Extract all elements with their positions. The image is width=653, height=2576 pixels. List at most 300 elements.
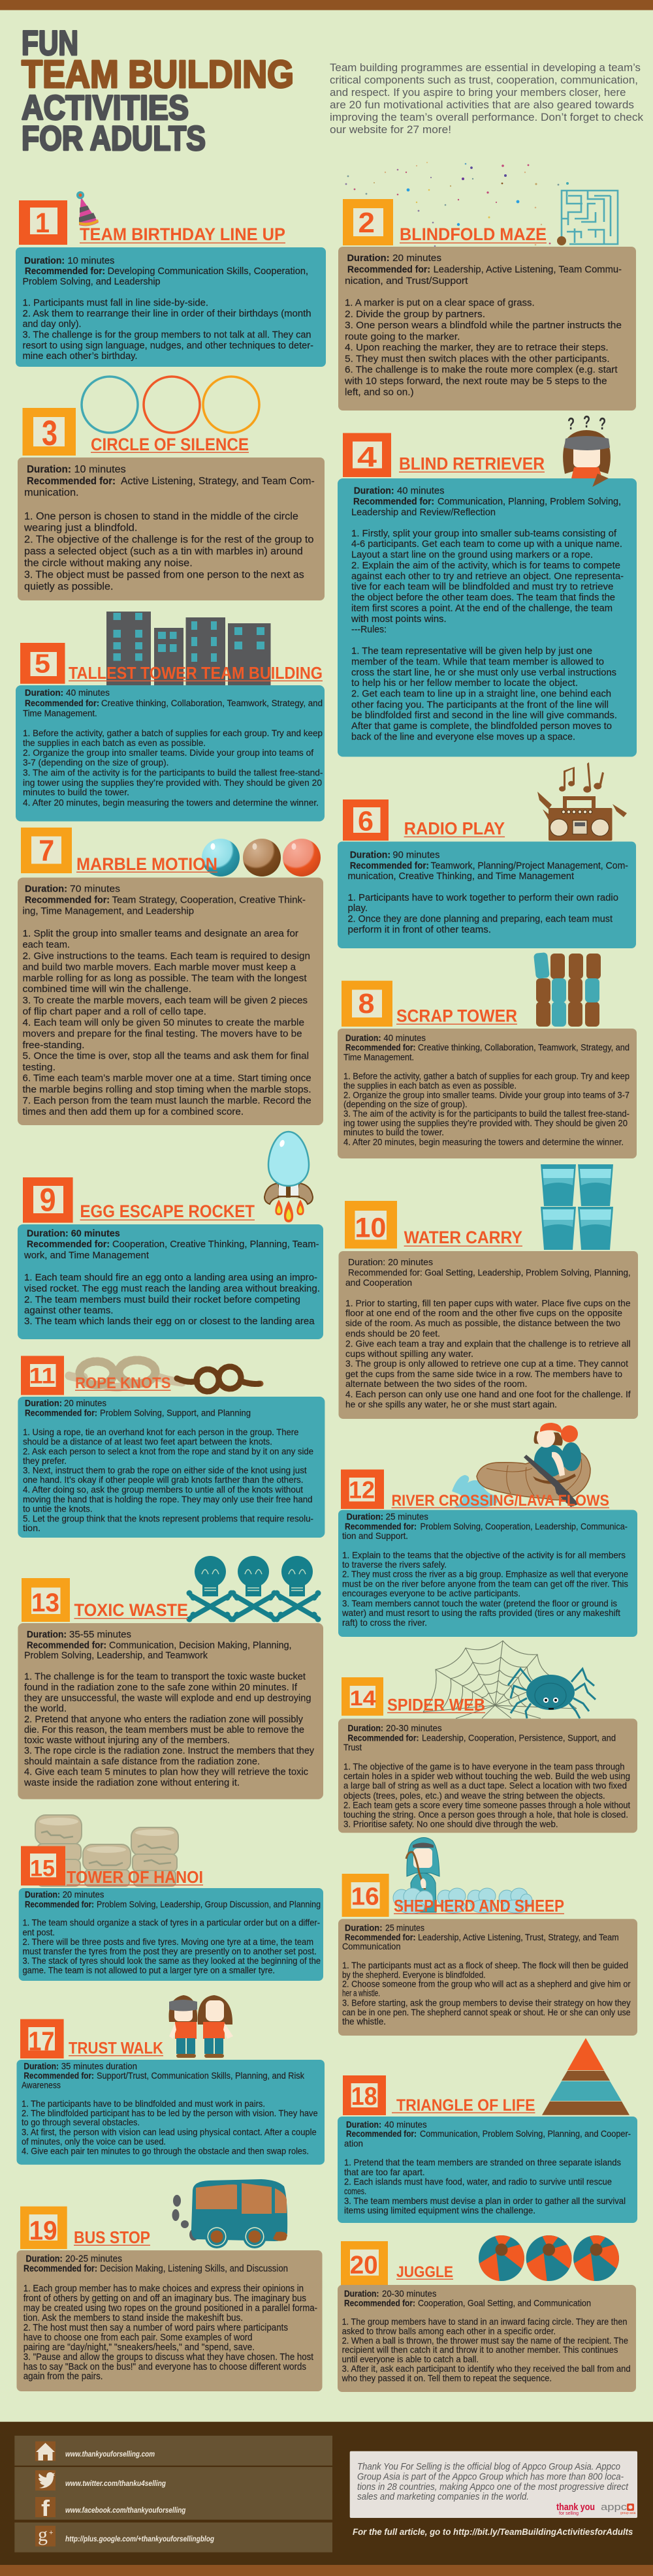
icon: rope knots — [69, 1360, 261, 1391]
text block: Recommended for: — [345, 1522, 417, 1531]
text block: mine each other’s birthday. — [22, 351, 137, 362]
text block — [22, 1890, 321, 1975]
text block: pairing are "day/night," "sneakers/heels," and "spend, save. — [24, 2342, 255, 2353]
text block: game. The team is not allowed to put a larger tyre on a smaller tyre. — [22, 1966, 275, 1975]
text block: 20 minutes — [63, 1890, 104, 1899]
number badge 5 — [20, 643, 65, 684]
number badge 8: 8 — [358, 988, 375, 1019]
text block: 10 minutes — [67, 256, 114, 266]
number badge 18: 18 — [351, 2083, 377, 2111]
text block: 2. Give each team a tray and explain that the challenge is to retrieve all — [345, 1338, 631, 1348]
heading: RIVER CROSSING/LAVA FLOWS — [392, 1492, 609, 1510]
google plus link: http://plus.google.com/+thankyouforsellingblog — [65, 2534, 215, 2543]
number badge 12 — [341, 1470, 384, 1509]
google plus link: + — [49, 2529, 53, 2537]
text block: ation — [344, 2138, 363, 2149]
number badge 7 — [21, 828, 72, 873]
text block: 20 minutes — [64, 1398, 106, 1408]
text block: Recommended for: — [24, 2070, 94, 2081]
number badge 16: 16 — [351, 1884, 379, 1911]
text block: to untie the knots. — [23, 1504, 93, 1514]
text block: Creative thinking, Collaboration, Teamwork, Strategy, and — [418, 1043, 629, 1052]
text block: side of the room. As much as possible, the distance between the two — [345, 1318, 620, 1328]
text block: Leadership, Cooperation, Persistence, Support, and — [422, 1733, 616, 1743]
activity 13: toxic waste — [18, 1556, 323, 1799]
facebook link: www.facebook.com/thankyouforselling — [65, 2506, 186, 2515]
text block: against each other to try and retrieve an object. One representa- — [351, 572, 624, 582]
number badge 4: 4 — [357, 441, 377, 473]
text block: the supplies in each batch as even as possible. — [23, 738, 206, 748]
text block: 3. The team members must devise a plan in order to gather all the survival — [344, 2196, 626, 2206]
intro paragraph: and respect. If you aspire to bring your members closer, here — [330, 86, 626, 99]
text block: with most points wins. — [351, 614, 447, 625]
text block: 3. After it, ask each participant to identify who they received the ball from and — [342, 2363, 631, 2374]
text block: 3. The challenge is for the group members to not talk at all. They can — [22, 330, 311, 341]
text block: tion. Ask the members to stand inside the makeshift bus. — [24, 2313, 243, 2323]
text block — [351, 486, 624, 743]
text block: 4. After 20 minutes, begin measuring the towers and determine the winner. — [343, 1137, 624, 1147]
main title: FOR ADULTS — [22, 119, 206, 158]
bottom bar — [0, 2565, 653, 2576]
text block: Duration: — [347, 1512, 383, 1522]
text block: 1. Each team should fire an egg onto a landing area using an impro- — [24, 1272, 317, 1283]
text block: 1. Participants have to work together to perform their own radio — [347, 893, 618, 903]
text block: 2. Each islands must have food, water, and radio to survive until rescue — [344, 2176, 612, 2186]
heading: EGG ESCAPE ROCKET — [80, 1202, 255, 1221]
icon: boombox radio — [537, 474, 627, 841]
text block — [343, 1723, 630, 1829]
text block: Creative thinking, Collaboration, Teamwork, Strategy, and — [101, 698, 323, 708]
text block: 1. Before the activity, gather a batch of supplies for each group. Try and keep — [343, 1072, 629, 1081]
panel: instructions — [18, 1623, 323, 1799]
text block: Recommended for: — [24, 2263, 97, 2274]
text block: 40 minutes — [385, 2119, 427, 2130]
icon: egg rocket — [264, 1132, 313, 1222]
text block — [344, 2119, 631, 2215]
icon: ball — [557, 236, 566, 245]
text block: must be on the river before anyone from the team can get off the river. This — [342, 1579, 628, 1589]
number badge 13 — [22, 1578, 70, 1622]
activity 3: circle of silence — [18, 377, 325, 600]
text block: 2. Explain the aim of the activity, which is for teams to compete — [351, 561, 620, 571]
text block: 1. One person is chosen to stand in the middle of the circle — [24, 511, 298, 522]
text block: (depending on the size of group). — [343, 1099, 468, 1110]
panel: instructions — [18, 878, 323, 1125]
heading: JUGGLE — [396, 2263, 453, 2281]
activity 18: triangle of life — [338, 2038, 637, 2223]
text block: Recommended for: — [27, 1641, 106, 1651]
text block: get the cups from the same side twice in a row. The members have to — [345, 1369, 622, 1379]
text block: the marble begins rolling and stop timing when the marble stops. — [22, 1084, 311, 1095]
text block: Recommended for: — [25, 894, 110, 906]
number badge 7: 7 — [39, 834, 54, 867]
activity 1: team birthday line up — [16, 191, 326, 367]
link panels — [14, 2436, 332, 2553]
heading: TEAM BIRTHDAY LINE UP — [80, 225, 285, 244]
icon: water splash — [452, 1475, 498, 1508]
heading: WATER CARRY — [404, 1228, 522, 1247]
text block: 7. Each person from the team must launch the marble. Record the — [22, 1095, 311, 1106]
text block: Recommended for: — [345, 1043, 415, 1052]
number badge 2: 2 — [358, 207, 375, 239]
text block: 2. There will be three posts and five tyres. Moving one tyre at a time, the team — [22, 1937, 313, 1947]
number badge 10: 10 — [355, 1213, 386, 1244]
text block: with 10 steps forward, the next route may be 5 steps to the — [344, 376, 607, 386]
text block: recipient will then catch it and throw it to another member. This continues — [342, 2344, 618, 2355]
text block: member of the team. While that team member is allowed to — [351, 657, 604, 667]
text block: Duration: — [26, 2254, 63, 2265]
google plus link — [35, 2524, 215, 2547]
text block: Duration: — [27, 464, 71, 475]
text block: 3. The team which lands their egg on or closest to the landing area — [24, 1316, 315, 1327]
text block: objects (trees, poles, etc.) and weave the string between the objects. — [343, 1791, 605, 1801]
text block — [344, 253, 622, 398]
text block: of minutes, only the voice can be used. — [22, 2136, 166, 2147]
number badge 20 — [341, 2241, 388, 2286]
text block: Communication, Problem Solving, Planning, and Cooper- — [420, 2128, 631, 2139]
intro paragraph: improving the team’s overall performance. Don’t forget to check — [330, 111, 643, 123]
panel: instructions — [18, 458, 325, 600]
text block: tion. — [23, 1523, 40, 1533]
number badge 11: 11 — [29, 1364, 56, 1389]
text block: 5. Once the time is over, stop all the teams and ask them for final — [22, 1051, 309, 1061]
text block: the supplies in each batch as even as possible. — [343, 1081, 517, 1091]
number badge 1 — [19, 200, 67, 245]
panel: instructions — [338, 1919, 637, 2036]
number badge 11 — [21, 1356, 64, 1395]
text block: 2. Give instructions to the teams. Each team is required to design — [22, 950, 310, 962]
text block: 20-30 minutes — [386, 1723, 442, 1733]
logo: thank you for selling: thank you — [556, 2502, 595, 2513]
number badge 14 — [342, 1677, 383, 1716]
number badge 19 — [20, 2207, 67, 2249]
text block: 3. To create the marble movers, each team will be given 2 pieces — [22, 995, 308, 1006]
text block: Recommended for: — [25, 266, 105, 277]
text block: Problem Solving, Leadership, and Teamwork — [24, 1651, 208, 1661]
main title: FUN — [22, 24, 78, 63]
text block: waste inside the radiation zone without entering it. — [24, 1778, 240, 1788]
text block: wearing just a blindfold. — [24, 522, 137, 534]
text block: cross the start line, he or she must only use verbal instructions — [351, 668, 616, 678]
icon: spider web — [423, 1641, 577, 1718]
text block: work, and Time Management — [24, 1250, 150, 1261]
text block: 5. They must then switch places with the other participants. — [345, 354, 610, 364]
heading: RADIO PLAY — [404, 818, 505, 838]
text block: 3. At first, the person with vision can lead using physical contact. After a couple — [22, 2126, 317, 2137]
text block: by the shepherd. Everyone is blindfolded. — [342, 1970, 486, 1980]
activity 7: marble motion — [18, 828, 323, 1125]
text block: movers and prepare for the final testing. The movers have to be — [22, 1029, 302, 1039]
panel: instructions — [17, 2060, 325, 2165]
text block: of flip chart paper and a roll of cello tape. — [22, 1006, 206, 1017]
text block: minutes to build the tower. — [23, 787, 129, 798]
text block: perform it in front of other teams. — [347, 925, 491, 935]
text block: 2. Get each team to line up in a straight line, one behind each — [351, 689, 611, 700]
icon: raft with paddlers — [477, 1423, 590, 1507]
text block — [342, 2288, 631, 2383]
text block: 3-7 (depending on the size of group). — [23, 758, 168, 768]
text block: each team. — [22, 939, 70, 950]
text block: 2. The host must then say a number of word pairs where participants — [24, 2323, 288, 2333]
text block: Team Strategy, Cooperation, Creative Think- — [112, 894, 306, 906]
text block — [342, 1923, 631, 2026]
number badge 6: 6 — [358, 806, 374, 837]
text block: Recommended for: — [25, 698, 99, 708]
text block: times and then add them up for a combined score. — [22, 1106, 244, 1117]
heading: TRUST WALK — [69, 2040, 163, 2058]
number badge 2 — [343, 199, 393, 245]
number badge 1: 1 — [35, 208, 50, 239]
number badge 15 — [21, 1846, 65, 1885]
text block: items using limited equipment wins the challenge. — [344, 2205, 535, 2215]
text block: 2. Choose someone from the group who will act as a shepherd and give him or — [342, 1979, 631, 1989]
text block: Cooperation, Goal Setting, and Communication — [418, 2297, 591, 2308]
activity 14: spider web — [338, 1641, 637, 1833]
text block: certain holes in a spider web without touching the web. Build the web using — [343, 1771, 630, 1781]
panel: instructions — [338, 2117, 637, 2223]
text block: resort to using sign language, nudges, and other techniques to deter- — [22, 341, 313, 351]
text block: that are too far apart. — [344, 2167, 424, 2177]
text block: can be in one pen. The shepherd cannot speak or shout. He or she can only use — [342, 2008, 631, 2017]
logo: appco group: appc — [601, 2502, 628, 2513]
activity 4: blind retriever — [338, 412, 637, 757]
text block: 4. Each team will only be given 50 minutes to create the marble — [22, 1017, 304, 1029]
text block: Problem Solving, Leadership, Group Discussion, and Planning — [97, 1899, 321, 1910]
text block: munication. — [24, 487, 79, 499]
logo: thank you for selling — [556, 2502, 595, 2516]
text block: Problem Solving, Cooperation, Leadership, Communica- — [421, 1522, 628, 1531]
text block: 3. The group is only allowed to retrieve one cup at a time. They cannot — [345, 1358, 628, 1369]
number badge 3: 3 — [42, 414, 57, 453]
text block: ent post. — [22, 1928, 55, 1937]
text block: Duration: — [24, 256, 65, 266]
text block: left, and so on.) — [345, 386, 414, 398]
text block: floor at one end of the room and the other five cups on the opposite — [345, 1308, 622, 1318]
text block: and build two marble movers. Each marble mover must keep a — [22, 962, 296, 972]
text block: 20 minutes — [392, 253, 441, 264]
text block: 2. Ask them to rearrange their line in order of their birthdays (month — [22, 309, 311, 319]
icon: tower buildings — [106, 612, 270, 685]
text block: who they passed it on. Tell them to repeat the sequence. — [342, 2373, 552, 2383]
icon: two friends — [168, 1995, 233, 2058]
text block: Active Listening, Strategy, and Team Com- — [121, 476, 315, 487]
text block: 40 minutes — [383, 1033, 426, 1043]
website link — [35, 2442, 155, 2461]
text block: 4. Upon reaching the marker, they are to retrace their steps. — [345, 342, 609, 353]
heading: MARBLE MOTION — [76, 854, 217, 874]
text block: Duration: — [346, 2119, 381, 2130]
text block: 4. Give each pair ten minutes to go through the obstacle and then swap roles. — [22, 2146, 309, 2156]
text block: other facing you. The participants at the front of the line will — [351, 700, 609, 710]
text block: combined time will win the challenge. — [22, 984, 191, 995]
text block: 2. Pretend that anyone who enters the radiation zone will possibly — [24, 1715, 304, 1725]
icon: three rings — [82, 377, 259, 433]
text block: 1. Firstly, split your group into smaller sub-teams consisting of — [351, 529, 617, 539]
facebook link — [35, 2496, 186, 2521]
text block: water) and must resort to using the rafts provided (tires or any makeshift — [342, 1608, 620, 1618]
facebook link: f — [41, 2496, 50, 2521]
twitter link: www.twitter.com/thanku4selling — [65, 2479, 167, 2488]
text block: Duration: — [25, 1890, 60, 1899]
twitter link — [35, 2470, 167, 2491]
number badge 20: 20 — [350, 2251, 378, 2279]
text block: he or she spills any water, he or she must start again. — [345, 1399, 557, 1410]
text block: Duration: — [350, 850, 390, 860]
text block: again from the pairs. — [24, 2372, 103, 2382]
heading: SHEPHERD AND SHEEP — [394, 1896, 564, 1916]
text block: 10 minutes — [74, 464, 126, 475]
text block: Teamwork, Planning/Project Management, Com- — [431, 861, 628, 871]
text block: 1. The group members have to stand in an inward facing circle. They are then — [342, 2316, 627, 2327]
text block: 2. When a ball is thrown, the thrower must say the name of the recipient. The — [342, 2335, 628, 2346]
text block: Recommended for: — [344, 2297, 415, 2308]
text block — [23, 688, 323, 808]
text block: 35-55 minutes — [69, 1630, 131, 1640]
text block: and day only). — [22, 319, 81, 330]
text block: Recommended for: — [25, 1899, 94, 1910]
text block: the object before the other team does. The team that finds the — [351, 593, 615, 603]
text block: 3. Next, instruct them to grab the rope on either side of the knot using just — [23, 1466, 307, 1475]
text block — [342, 1512, 628, 1628]
text block: 1. The objective of the game is to have everyone in the team pass through — [343, 1762, 625, 1771]
text block: 2. The blindfolded participant has to be led by the person with vision. They have — [22, 2108, 318, 2118]
text block: Duration: — [347, 1723, 383, 1733]
text block: 2. They must cross the river as a big group. Emphasize as well that everyone — [342, 1569, 628, 1579]
number badge 18 — [343, 2075, 386, 2115]
heading: BLIND RETRIEVER — [399, 454, 545, 474]
number badge 16 — [342, 1874, 389, 1917]
text block: 4. After doing so, ask the group members to untie all of the knots without — [23, 1485, 303, 1495]
text block: tion and Support. — [342, 1531, 408, 1541]
heading: TALLEST TOWER TEAM BUILDING — [69, 663, 323, 683]
text block: cups without spilling any water. — [345, 1348, 473, 1359]
faded rope knot — [69, 1360, 182, 1388]
icon: blindfolded girl — [563, 412, 611, 478]
icon: three beach balls — [479, 2235, 619, 2281]
text block: 1. Prior to starting, fill ten paper cups with water. Place five cups on the — [345, 1297, 631, 1308]
text block — [24, 1228, 320, 1327]
text block — [22, 2061, 318, 2156]
text block: Recommended for: Goal Setting, Leadership, Problem Solving, Planning, — [348, 1267, 631, 1278]
panel: instructions — [18, 1397, 325, 1538]
icon: blindfolded girl: ? — [583, 412, 590, 431]
text block: 1. Before the activity, gather a batch of supplies for each group. Try and keep — [23, 728, 323, 738]
text block — [22, 256, 313, 362]
text block: 35 minutes duration — [61, 2061, 137, 2072]
activity 2: blindfold maze — [338, 162, 636, 411]
text block: Recommended for: — [347, 264, 430, 275]
intro paragraph: our website for 27 more! — [330, 123, 451, 136]
panel: instructions — [16, 685, 325, 821]
text block: encourages everyone to be active participants. — [342, 1589, 520, 1598]
text block: 70 minutes — [70, 884, 120, 894]
text block: 3. The aim of the activity is for the participants to build the tallest free-stand- — [343, 1109, 629, 1119]
intro paragraph: critical components such as trust, cooperation, communication, — [330, 74, 638, 86]
text block: should maintain a safe distance from the radiation zone. — [24, 1757, 260, 1767]
text block: Problem Solving, and Leadership — [22, 277, 161, 287]
activity 11: rope knots — [18, 1356, 325, 1538]
icon: party hat — [76, 191, 99, 226]
text block: must transfer the tyres from the post they are presently on to another set post. — [22, 1946, 317, 1957]
text block: to traverse the rivers safely. — [342, 1560, 447, 1570]
text block: Duration: — [347, 253, 389, 264]
panel: instructions — [338, 1510, 637, 1637]
text block — [24, 1630, 315, 1788]
icon: maze — [562, 191, 618, 244]
text block: touching the string. Once a person goes through a hole, that hole is closed. — [343, 1810, 628, 1820]
text block: Decision Making, Listening Skills, and Discussion — [100, 2263, 288, 2274]
text block: 5. Let the group think that the knots represent problems that require resolu- — [23, 1514, 313, 1523]
text block: testing. — [22, 1062, 56, 1073]
heading: TRIANGLE OF LIFE — [396, 2096, 535, 2115]
text block: 40 minutes — [66, 688, 110, 698]
text block: Time Management. — [343, 1052, 414, 1063]
text block — [347, 850, 628, 935]
icon: stacked cans — [534, 952, 601, 1027]
panel: instructions — [338, 1251, 638, 1419]
text block: moving the hand that is holding the rope. They may only use their free hand — [23, 1495, 312, 1504]
text block: 3. The rope circle is the radiation zone. Instruct the members that they — [24, 1746, 315, 1756]
text block: a large ball of string as well as a duct tape. Select a location with two fixed — [343, 1780, 627, 1791]
text block — [343, 1033, 629, 1147]
website link: www.thankyouforselling.com — [65, 2449, 155, 2459]
text block: Leadership, Active Listening, Team Commu- — [434, 264, 622, 275]
top bar — [0, 0, 653, 10]
text block: route going to the marker. — [345, 332, 460, 342]
text block: ---Rules: — [351, 625, 387, 635]
text block: has to say "Back on the bus!" and everyone has to choose different words — [24, 2362, 306, 2372]
heading: TOXIC WASTE — [74, 1600, 188, 1620]
text block: be blindfolded first and second in the line will give commands. — [351, 710, 617, 721]
brown rope knot — [177, 1367, 261, 1391]
number badge 4 — [343, 433, 391, 477]
text block: Duration: — [27, 1630, 67, 1640]
text block: 2. The objective of the challenge is for the rest of the group to — [24, 534, 314, 546]
text block: 1. The participants have to be blindfolded and must work in pairs. — [22, 2098, 265, 2109]
text block: 3. The stack of tyres should look the same as they looked at the beginning of the — [22, 1956, 321, 1966]
text block: 3. The object must be passed from one person to the next as — [24, 569, 304, 581]
panel: instructions — [18, 1224, 323, 1339]
text block: Duration: — [354, 486, 394, 496]
article link: For the full article, go to http://bit.ly/TeamBuildingActivitiesforAdults — [353, 2526, 633, 2537]
text block: Awareness — [22, 2079, 61, 2090]
text block: back of the line and everyone else moves up a space. — [351, 732, 575, 743]
text block: 3. Prioritise safety. No one should dive through the web. — [343, 1820, 558, 1829]
text block: 1. The team should organize a stack of tyres in a particular order but on a differ- — [22, 1917, 320, 1928]
text block: ing, Time Management, and Leadership — [22, 906, 194, 916]
text block: Recommended for: — [27, 476, 116, 487]
text block: Duration: — [24, 2061, 59, 2072]
text block: to go through several obstacles. — [22, 2117, 140, 2128]
text block: found in the radiation zone to the safe zone within 20 minutes. If — [24, 1683, 298, 1693]
about box: tions in 28 countries, making Appco one of the most progressive direct — [357, 2481, 629, 2492]
text block: Leadership and Review/Reflection — [351, 508, 496, 518]
panel: instructions — [17, 2250, 323, 2391]
number badge 10 — [345, 1201, 397, 1249]
text block: Duration: 20 minutes — [348, 1257, 433, 1267]
activity 5: tallest tower team building — [16, 612, 325, 821]
icon: blindfolded girl: ? — [599, 414, 606, 433]
logo: thank you for selling: for selling — [559, 2511, 579, 2516]
text block: 1. The challenge is for the team to transport the toxic waste bucket — [24, 1672, 306, 1683]
icon: bus and smoke — [172, 2179, 287, 2248]
number badge 9: 9 — [40, 1181, 56, 1218]
number badge 3 — [22, 408, 76, 456]
text block: Support/Trust, Communication Skills, Planning, and Risk — [97, 2070, 305, 2081]
icon: blindfolded girl: ? — [567, 414, 575, 433]
main title — [22, 24, 294, 158]
text block: minutes to build the tower. — [343, 1128, 444, 1137]
